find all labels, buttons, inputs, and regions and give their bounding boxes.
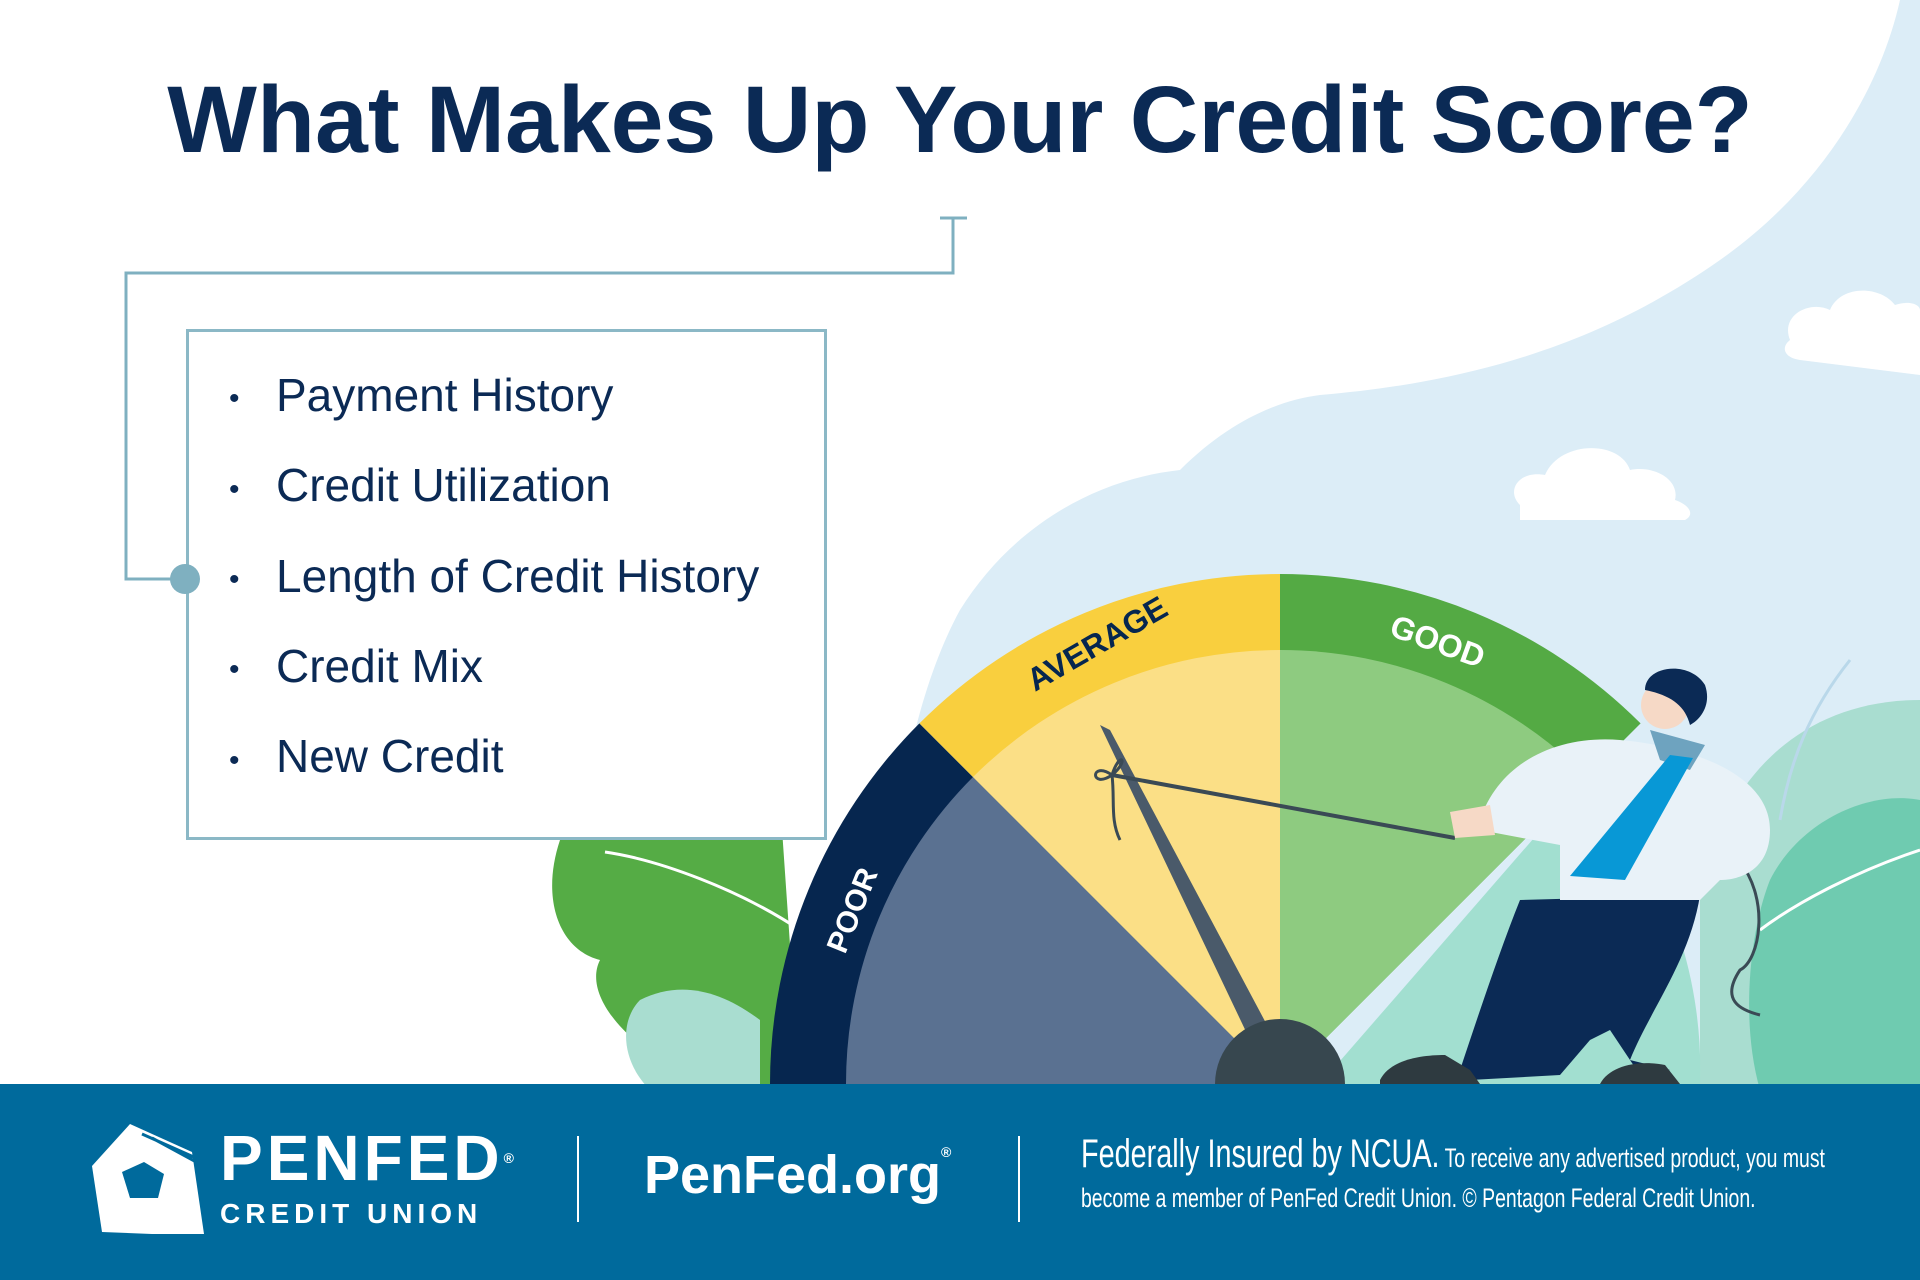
- left green leaves: [552, 790, 800, 1090]
- list items: [229, 369, 760, 782]
- website: PenFed.org®: [644, 1144, 951, 1205]
- panel: factors list: [186, 329, 827, 840]
- needle: [1096, 725, 1455, 1084]
- connector dot: [170, 564, 200, 594]
- average inner: [973, 650, 1280, 1084]
- average band: [919, 574, 1280, 1084]
- list items: New Credit: [276, 730, 504, 782]
- divider: [577, 1136, 579, 1222]
- label average: AVERAGE: [1020, 589, 1173, 698]
- logo text: PENFED®: [220, 1122, 518, 1194]
- label good: GOOD: [1386, 608, 1490, 675]
- disclaimer: [1081, 1132, 1825, 1213]
- good inner: [1280, 650, 1587, 1084]
- right teal leaves: [1700, 660, 1920, 1090]
- list items: •: [229, 744, 240, 777]
- list items: •: [229, 563, 240, 596]
- title: What Makes Up Your Credit Score?: [167, 67, 1753, 173]
- disclaimer: Federally Insured by NCUA. To receive any advertised product, you must: [1081, 1132, 1825, 1176]
- list items: •: [229, 382, 240, 415]
- good band: [1280, 574, 1641, 1084]
- list items: •: [229, 653, 240, 686]
- divider: [1018, 1136, 1020, 1222]
- list items: Credit Mix: [276, 640, 483, 692]
- list items: Credit Utilization: [276, 459, 611, 511]
- disclaimer: become a member of PenFed Credit Union. © Pentagon Federal Credit Union.: [1081, 1183, 1756, 1213]
- poor inner: [846, 777, 1280, 1084]
- clouds: [1785, 291, 1920, 375]
- poor band: [770, 723, 1280, 1084]
- list items: Payment History: [276, 369, 613, 421]
- connector line: [124, 216, 967, 580]
- list items: Length of Credit History: [276, 550, 759, 602]
- sky shape: [880, 0, 1920, 1090]
- logo icon: [92, 1124, 204, 1234]
- list items: •: [229, 473, 240, 506]
- label poor: POOR: [821, 863, 885, 958]
- footer: CREDIT UNION: [220, 1198, 482, 1229]
- man: [1380, 669, 1770, 1084]
- footer: [0, 1084, 1920, 1280]
